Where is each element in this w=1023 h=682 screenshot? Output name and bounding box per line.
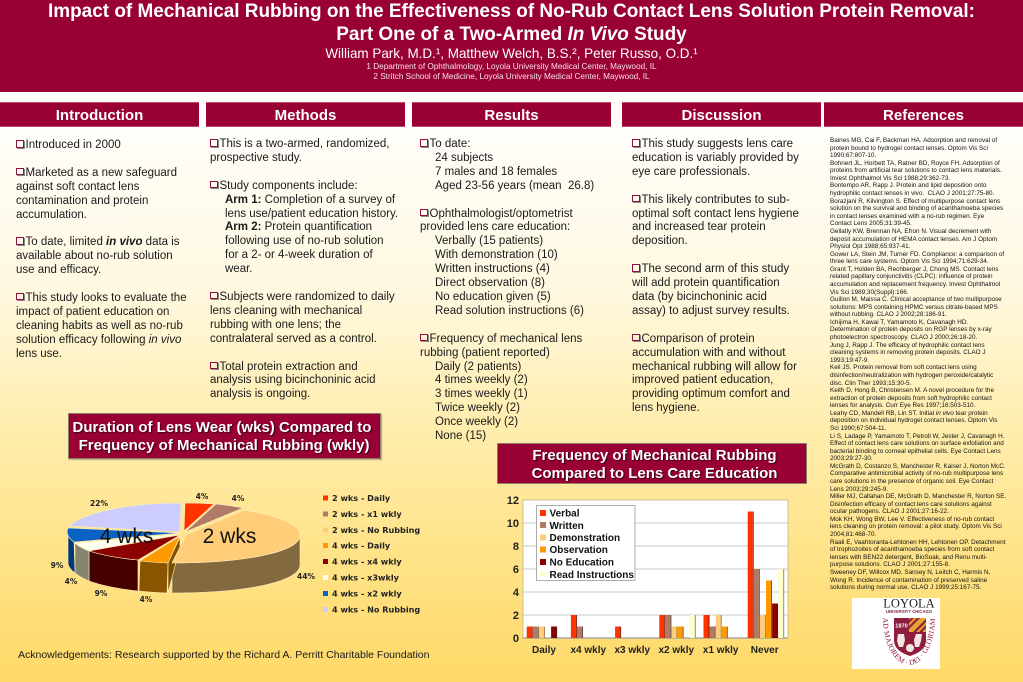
text: references list: Determination of protein deposits on RGP lenses by x-ray (830, 326, 992, 333)
text: introduction bullets: cleaning habits as well as no-rub (16, 320, 183, 332)
logo: Loyola University Chicago: UNIVERSITY CHICAGO (886, 609, 933, 614)
text: results bullets: With demonstration (10) (435, 249, 558, 261)
text: discussion bullets (632, 138, 799, 414)
text: references list: purpose solutions. CLAO J 2001;27:155-8. (830, 561, 950, 568)
text: results bullets: Read solution instructions (6) (435, 305, 584, 317)
text: discussion bullets: accumulation with and without (632, 347, 785, 359)
text: references list: of trophozoites of acanthamoeba species from soft contact (830, 546, 994, 553)
text: methods bullets (210, 138, 398, 400)
affiliations (366, 62, 657, 81)
text: references list: Mok KH, Wong BW, Lee V. Effectiveness of no-rub contact (830, 516, 994, 523)
text: methods bullets: following use of no-rub solution (225, 235, 384, 247)
pie legend: 4 wks - x3wkly (332, 572, 400, 582)
text: results bullets: 4 times weekly (2) (435, 374, 528, 386)
text: references list: bacterial binding to corneal epithelial cells. Eye Contact Lens (830, 448, 1001, 455)
text: discussion bullets: providing optimum comfort and (632, 388, 790, 400)
pie percent labels: 4% (232, 494, 245, 503)
text: references list: lenses for analysis. Curr Eye Res 1997;16:503-510. (830, 402, 975, 409)
bars: No Education (551, 604, 778, 638)
heading: Results (412, 102, 611, 127)
text: references list: Keith D, Hong B, Christensen M. A novel procedure for the (830, 387, 994, 394)
text: references list: Physiol Opt 1988;65:937-41. (830, 243, 910, 250)
heading: Methods: Methods (275, 107, 336, 124)
y axis labels: 10 (507, 518, 519, 530)
text: methods bullets: Study components include: (220, 180, 358, 192)
pie percent labels: 9% (51, 561, 64, 570)
bar chart legend: Observation (550, 545, 608, 556)
text: references list: Wong R. Incidence of contamination of preserved saline (830, 577, 987, 584)
text: references list: lenses with BEN22 detergent, BioSoak, and Renu multi- (830, 554, 987, 561)
text: references list: Guillon M, Maissa C. Clinical acceptance of two multipurpose (830, 296, 1002, 303)
text: references list: ocular pathogens. CLAO J 2001;27:16-22. (830, 508, 949, 515)
text: references list: Leahy CD, Mandell RB, Lin ST. Initial in vivo tear protein (830, 410, 988, 417)
text: references list: protein bound to hydrogel contact lenses. Optom Vis Sci (830, 145, 988, 152)
text: references list: Borazjani R, Kilvington S. Effect of multipurpose contact lens (830, 198, 1000, 205)
bar chart legend: Demonstration (550, 533, 620, 544)
text: introduction bullets: against soft contact lens (16, 181, 139, 193)
text: results bullets: 7 males and 18 females (435, 166, 557, 178)
pie legend: 2 wks - Daily (332, 493, 391, 503)
text: references list: deposition on individual hydrogel contact lenses. Optom Vis (830, 417, 997, 424)
text: references list: three lens care systems. Optom Vis Sci 1994;71:629-34. (830, 258, 989, 265)
text: results bullets: No education given (5) (435, 291, 551, 303)
text: references list: Contact Lens 2005;31:39-45. (830, 220, 912, 227)
text: discussion bullets: This study suggests lens care (642, 138, 793, 150)
text: introduction bullets: solution efficacy following in vivo (16, 334, 181, 346)
text: results bullets: Aged 23-56 years (mean 26.8) (435, 180, 594, 192)
callout: bar chart title: Compared to Lens Care Education (532, 464, 777, 482)
plot area (523, 500, 788, 638)
text: references list: solutions during normal use. CLAO J 1999;25:167-75. (830, 584, 981, 591)
text: discussion bullets: Comparison of protein (642, 333, 755, 345)
text: introduction bullets: impact of patient education on (16, 306, 169, 318)
title (48, 1, 975, 45)
y axis labels: 2 (513, 610, 519, 622)
text: references list: hydrophilic contact lenses in vivo. CLAO J 2001;27:75-80. (830, 190, 994, 197)
pie legend: 4 wks - x2 wkly (332, 588, 402, 598)
heading: Discussion (622, 102, 821, 127)
text: references list: disinfection/neutralization with hydrogen peroxide/catalytic (830, 372, 993, 379)
bar chart legend (536, 506, 635, 581)
text: references list: Keil JS. Protein removal from soft contact lens using (830, 364, 977, 371)
text: methods bullets: Arm 1: Completion of a survey of (225, 194, 395, 206)
x axis labels: x4 wkly (571, 645, 607, 656)
text: references list: accumulation and replacement frequency. Invest Ophthalmol (830, 281, 1000, 288)
text: references list: McGrath D, Costanzo S, Manchester R, Kaiser J, Norton McC. (830, 463, 1006, 470)
logo: Loyola University Chicago (852, 598, 940, 669)
heading: Methods (206, 102, 405, 127)
text: references list: Gower LA, Stein JM, Turner FD. Compliance: a comparison of (830, 251, 1004, 258)
text: introduction bullets (16, 139, 187, 360)
text: discussion bullets: deposition. (632, 235, 688, 247)
pie legend: 4 wks - No Rubbing (332, 604, 420, 614)
heading: Introduction: Introduction (56, 107, 143, 124)
text: references list: lens cleaning on protein removal: a pilot study. Optom Vis Sci (830, 523, 1002, 530)
text: results bullets: Daily (2 patients) (435, 360, 521, 372)
acknowledgements: Acknowledgements: Research supported by the Richard A. Perritt Charitable Foundation (18, 649, 429, 661)
text: references list: Disinfection efficacy of contact lens care solutions against (830, 501, 992, 508)
text: references list: Miller MJ, Callahan DE, McGrath D, Manchester R, Norton SE. (830, 493, 1006, 500)
logo crest shield: 1870 (895, 624, 908, 630)
heading: Discussion: Discussion (681, 107, 762, 124)
text: discussion bullets: will add protein quantification (632, 277, 780, 289)
text: references list: related papillary conjunctivitis (CLPC): influence of protein (830, 273, 993, 280)
header banner (0, 0, 1023, 92)
x axis labels: Daily (532, 645, 556, 656)
text: discussion bullets: The second arm of this study (642, 263, 789, 275)
text: introduction bullets: lens use. (16, 348, 62, 360)
text: references list: Effect of contact lens care solutions on surface exfoliation and (830, 440, 1004, 447)
text: references list: Jung J, Rapp J. The efficacy of hydrophilic contact lens (830, 342, 985, 349)
text: methods bullets: Total protein extraction and (220, 360, 358, 372)
text: introduction bullets: accumulation. (16, 209, 87, 221)
bars: Observation (678, 580, 772, 638)
y axis labels: 6 (513, 564, 519, 576)
text: references list: Invest Ophthalmol Vis Sci 1988;29:362-73. (830, 175, 950, 182)
text: introduction bullets: use and efficacy. (16, 264, 101, 276)
heading: References: References (883, 107, 964, 124)
text: references list: extraction of protein deposits from soft hydrophilic contact (830, 395, 992, 402)
text: results bullets: Twice weekly (2) (435, 402, 520, 414)
callout: bar chart title: Frequency of Mechanical Rubbing (532, 447, 777, 464)
text: references list (830, 137, 1006, 591)
text: introduction bullets: contamination and protein (16, 195, 148, 207)
title: Part One of a Two-Armed In Vivo Study (336, 24, 687, 45)
text: results bullets: Direct observation (8) (435, 277, 545, 289)
text: methods bullets: Subjects were randomized to daily (220, 291, 395, 303)
text: discussion bullets: education is variably provided by (632, 152, 799, 164)
text: methods bullets: rubbing with one lens; the (210, 319, 341, 331)
text: references list: Ichijima H, Kawai T, Yamamoto K, Cavanagh HD. (830, 319, 968, 326)
text: discussion bullets: eye care professionals. (632, 166, 750, 178)
text: introduction bullets: This study looks to evaluate the (26, 292, 187, 304)
text: references list: Baines MG, Cai F, Backman HA. Adsorption and removal of (830, 137, 997, 144)
pie legend: 2 wks - No Rubbing (332, 525, 420, 535)
logo motto: AD MAJOREM · DEI · GLORIAM (883, 618, 936, 666)
y axis labels (507, 495, 520, 645)
x axis labels (532, 645, 779, 656)
text: references list: 2003;29:27-30. (830, 455, 873, 462)
pie legend (323, 493, 420, 614)
text: results bullets (420, 138, 594, 442)
text: discussion bullets: This likely contributes to sub- (642, 194, 790, 206)
authors: William Park, M.D.¹, Matthew Welch, B.S.², Peter Russo, O.D.¹ (325, 46, 698, 61)
callout: pie chart title: Duration of Lens Wear (wks) Compared to (73, 419, 371, 436)
pie overlay labels (100, 525, 256, 548)
pie legend: 4 wks - x4 wkly (332, 556, 402, 566)
text: references list: care solutions in the presence of organic soil. Eye Contact (830, 478, 993, 485)
pie percent labels: 44% (297, 572, 315, 581)
callout: bar chart title (497, 443, 807, 484)
y axis labels: 8 (513, 541, 519, 553)
bar chart legend: Verbal (550, 508, 580, 520)
text: references list: 1990;67:807-10. (830, 152, 876, 159)
text: references list: 1993;19:47-9. (830, 357, 869, 364)
bar chart legend: Read Instructions (550, 570, 634, 581)
text: methods bullets: for a 2- or 4-week duration of (225, 249, 373, 261)
pie percent labels: 4% (65, 577, 78, 586)
text: methods bullets: lens cleaning with mechanical (210, 305, 362, 317)
heading: References (824, 102, 1023, 127)
callout: pie chart title: Frequency of Mechanical Rubbing (wkly) (79, 437, 370, 454)
text: references list: disc. Clin Ther 1993;15:30-5. (830, 380, 911, 386)
text: methods bullets: lens use/patient education history. (225, 208, 398, 220)
text: references list: deposit accumulation of HEMA contact lenses. Am J Optom (830, 236, 997, 243)
text: references list: Raali E, Vaahtoranta-Lehtonen HH, Lehtonen OP. Detachment (830, 539, 1005, 546)
text: references list: Sci 1990;67:504-11. (830, 425, 886, 432)
x axis labels: Never (751, 645, 779, 656)
text: methods bullets: Arm 2: Protein quantification (225, 221, 372, 233)
text: discussion bullets: lens hygiene. (632, 402, 700, 414)
text: references list: Vis Sci 1989;30(Suppl):166. (830, 289, 909, 296)
text: methods bullets: prospective study. (210, 152, 302, 164)
x axis labels: x3 wkly (615, 645, 651, 656)
bar chart legend: Written (550, 521, 584, 532)
text: results bullets: 24 subjects (435, 152, 493, 164)
text: references list: Comparative antimicrobial activity of no-rub multipurpose lens (830, 470, 1003, 477)
text: results bullets: 3 times weekly (1) (435, 388, 528, 400)
pie percent labels (51, 492, 315, 604)
text: results bullets: Once weekly (2) (435, 416, 518, 428)
pie percent labels: 4% (196, 492, 209, 501)
bars: Demonstration (539, 615, 766, 638)
pie top slices (67, 503, 300, 563)
text: results bullets: Verbally (15 patients) (435, 235, 543, 247)
heading: Introduction (0, 102, 199, 127)
text: references list: solution on the survival and binding of acanthamoeba species (830, 205, 1003, 212)
pie legend: 2 wks - x1 wkly (332, 509, 402, 519)
text: discussion bullets: data (by bicinchoninic acid (632, 291, 767, 303)
text: methods bullets: wear. (225, 263, 252, 275)
bar chart (507, 495, 788, 656)
text: introduction bullets: Introduced in 2000 (26, 139, 121, 151)
callout: pie chart title (68, 413, 381, 459)
text: references list: proteins from artificial tear solutions to contact lens materials. (830, 167, 1002, 174)
x axis labels: x2 wkly (659, 645, 695, 656)
bar chart legend: No Education (550, 558, 614, 568)
text: references list: solutions: MPS containing HPMC versus citrate-based MPS (830, 304, 998, 311)
text: discussion bullets: improved patient education, (632, 374, 773, 386)
y axis labels: 0 (513, 633, 519, 645)
text: references list: 2004;81:468-70. (830, 531, 876, 538)
text: references list: Li S, Ladage P, Yamamoto T, Petroll W, Jester J, Cavanagh H. (830, 433, 1004, 440)
pie percent labels: 22% (90, 499, 108, 508)
bars: Read Instructions (690, 569, 784, 638)
text: results bullets: To date: (430, 138, 470, 150)
text: references list: without rubbing. CLAO J 2002;28:186-91. (830, 311, 947, 318)
text: references list: Lens 2003;29:245-9. (830, 486, 888, 493)
pie sides (67, 528, 300, 593)
bars: Verbal (527, 512, 754, 638)
text: methods bullets: This is a two-armed, randomized, (220, 138, 390, 150)
text: results bullets: Frequency of mechanical lens (430, 333, 582, 345)
text: methods bullets: analysis using bicinchoninic acid (210, 374, 376, 386)
text: results bullets: Written instructions (4) (435, 263, 550, 275)
y axis labels: 4 (513, 587, 520, 599)
text: results bullets: None (15) (435, 430, 486, 442)
text: references list: photoelectron spectroscopy. CLAO J 2000;26:18-20. (830, 334, 977, 341)
text: introduction bullets: Marketed as a new safeguard (26, 167, 177, 179)
title: Impact of Mechanical Rubbing on the Effectiveness of No-Rub Contact Lens Solution Protein Removal: (48, 1, 975, 22)
bars: Written (533, 569, 760, 638)
x axis labels: x1 wkly (703, 645, 739, 656)
text: references list: Grant T, Holden BA, Rechberger J, Chong MS. Contact lens (830, 266, 998, 273)
pie overlay labels: 2 wks (203, 525, 256, 548)
text: results bullets: rubbing (patient reported) (420, 347, 550, 359)
y axis labels: 12 (507, 495, 519, 507)
pie chart (51, 492, 420, 614)
heading: Results: Results (484, 107, 539, 124)
affiliations: 2 Stritch School of Medicine, Loyola University Medical Center, Maywood, IL (373, 72, 650, 81)
text: references list: in contact lenses examined with a no-rub regimen. Eye (830, 213, 984, 220)
pie percent labels: 9% (95, 589, 108, 598)
text: discussion bullets: assay) to adjust survey results. (632, 305, 790, 317)
text: discussion bullets: and increased tear protein (632, 221, 766, 233)
text: references list: Sweeney DF, Willcox MD, Sansey N, Leitch C, Harmis N, (830, 569, 990, 576)
affiliations: 1 Department of Ophthalmology, Loyola University Medical Center, Maywood, IL (366, 62, 657, 71)
pie overlay labels: 4 wks (100, 525, 153, 548)
text: discussion bullets: optimal soft contact lens hygiene (632, 208, 799, 220)
text: introduction bullets: available about no-rub solution (16, 250, 173, 262)
text: references list: cleaning systems in removing protein deposits. CLAO J (830, 349, 986, 356)
text: references list: Bohnert JL, Horbett TA, Ratner BD, Royce FH. Adsorption of (830, 160, 1000, 167)
text: introduction bullets: To date, limited in vivo data is (26, 236, 180, 248)
text: references list: Bontempo AR, Rapp J. Protein and lipid deposition onto (830, 182, 987, 189)
pie legend: 4 wks - Daily (332, 540, 391, 550)
text: methods bullets: contralateral served as a control. (210, 333, 377, 345)
text: results bullets: provided lens care education: (420, 221, 570, 233)
pie percent labels: 4% (140, 595, 153, 604)
text: references list: Gellatly KW, Brennan NA, Efron N. Visual decrement with (830, 228, 991, 235)
text: methods bullets: analysis is ongoing. (210, 388, 310, 400)
text: results bullets: Ophthalmologist/optometrist (430, 208, 573, 220)
text: discussion bullets: mechanical rubbing will allow for (632, 360, 797, 372)
